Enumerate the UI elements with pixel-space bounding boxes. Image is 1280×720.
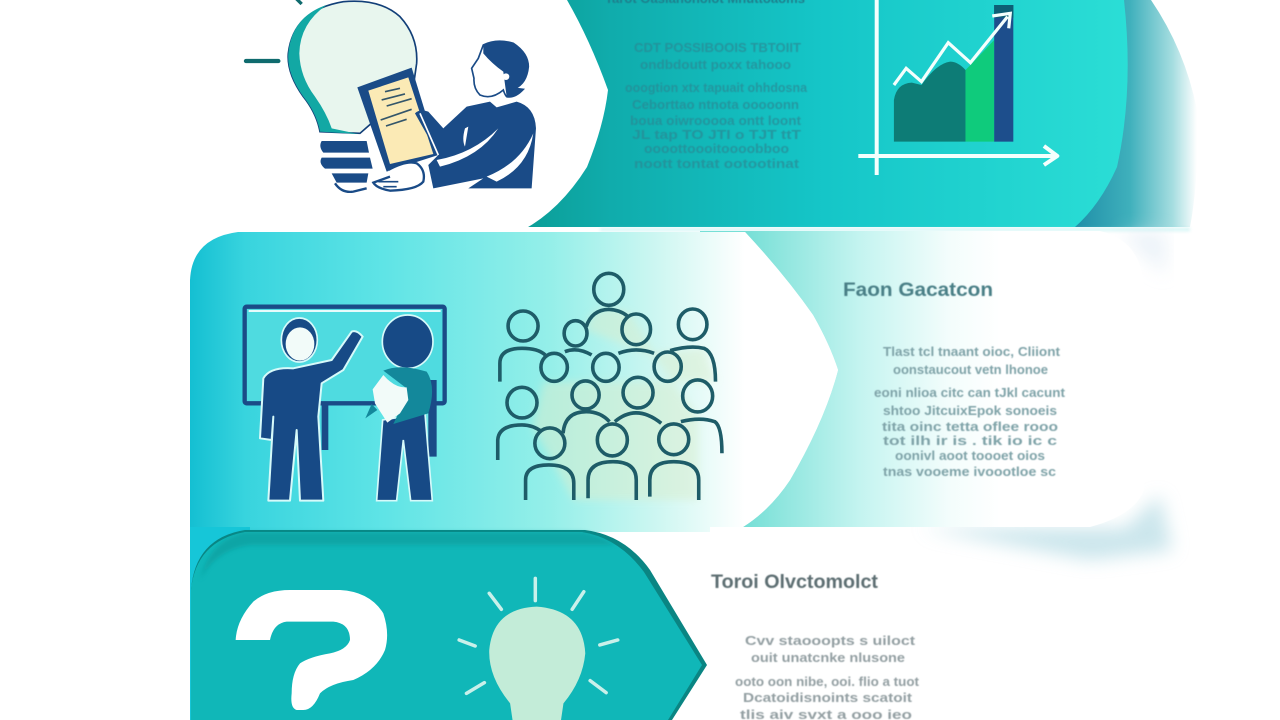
top inner shadow: [200, 532, 615, 580]
text block: middle panel: tot ilh ir is . tik io ic c: [883, 434, 1057, 448]
band shadow fold: [1060, 0, 1197, 227]
text block: middle panel: eoni nlioa citc can tJkl cacunt: [874, 386, 1066, 400]
panel heading: Faon Gacatcon: [843, 280, 993, 301]
text block: middle panel: Tlast tcl tnaant oioc, Cliiont: [883, 345, 1061, 359]
text block: middle panel: oonivl aoot toooet oios: [895, 449, 1045, 463]
panel: classroom band: [190, 231, 1172, 560]
text block: top panel: ooogtion xtx tapuait ohhdosna: [625, 81, 808, 95]
teacher figure: [260, 331, 363, 501]
text block: middle panel: shtoo JitcuixEpok sonoeis: [883, 404, 1057, 418]
text block: top panel: oooottoooitoooobboo: [644, 142, 789, 156]
panel: top chart band: [220, 0, 1197, 230]
divider glow line: [600, 228, 1190, 231]
text block: middle panel: oonstaucout vetn lhonoe: [893, 363, 1048, 377]
top-right soft shadow: [1120, 232, 1165, 275]
band main fill: [520, 0, 1128, 227]
text block: middle panel: tnas vooeme ivoootloe sc: [883, 465, 1056, 479]
lower cyan strip: [190, 525, 710, 532]
teal arrow darker rim: [191, 530, 707, 720]
text block: top panel: boua oiwrooooa ontt loont: [630, 114, 802, 128]
icon: teacher and student at board: [245, 307, 445, 501]
icon: person holding document: [357, 41, 536, 191]
cyan corner behind arrow: [190, 527, 250, 720]
icon: lightbulb: [246, 0, 417, 192]
text block: middle panel: [874, 345, 1066, 479]
board: [245, 307, 445, 403]
text block: bottom panel: ouit unatcnke nlusone: [751, 651, 905, 665]
icon: glowing bulb: [459, 578, 618, 720]
text block: bottom panel: [735, 634, 920, 720]
panel: question and idea band: [190, 527, 920, 720]
student figure: [377, 413, 432, 501]
teal arrow fill: [191, 532, 702, 720]
text block: bottom panel: Cvv staooopts s uiloct: [745, 634, 916, 648]
text block: top panel: CDT POSSIBOOIS TBTOIIT: [634, 41, 801, 55]
text block: middle panel: tita oinc tetta oflee rooo: [882, 420, 1058, 434]
question mark icon: [236, 590, 387, 710]
text block: bottom panel: ooto oon nibe, ooi. flio a tuot: [735, 675, 920, 689]
text block: bottom panel: Dcatoidisnoints scatoit: [743, 691, 913, 705]
icon: audience group: [498, 273, 722, 500]
text block: top panel: [625, 41, 808, 171]
arrow gradient fill: [190, 232, 838, 527]
bar chart with rising arrow: [858, 0, 1057, 175]
text block: top panel: JL tap TO JTI o TJT ttT: [632, 128, 801, 142]
text block: top panel: ondbdoutt poxx tahooo: [640, 58, 791, 72]
band soft shadow: [920, 495, 1172, 560]
panel heading: Toroi Olvctomolct: [711, 572, 879, 593]
right pale panel: [700, 231, 1144, 527]
text block: top panel: Ceborttao ntnota ooooonn: [632, 98, 799, 112]
arrow-shaped white base: [190, 232, 838, 527]
white arrow shape: [220, 0, 608, 230]
text block: top panel: noott tontat ootootinat: [634, 157, 800, 171]
